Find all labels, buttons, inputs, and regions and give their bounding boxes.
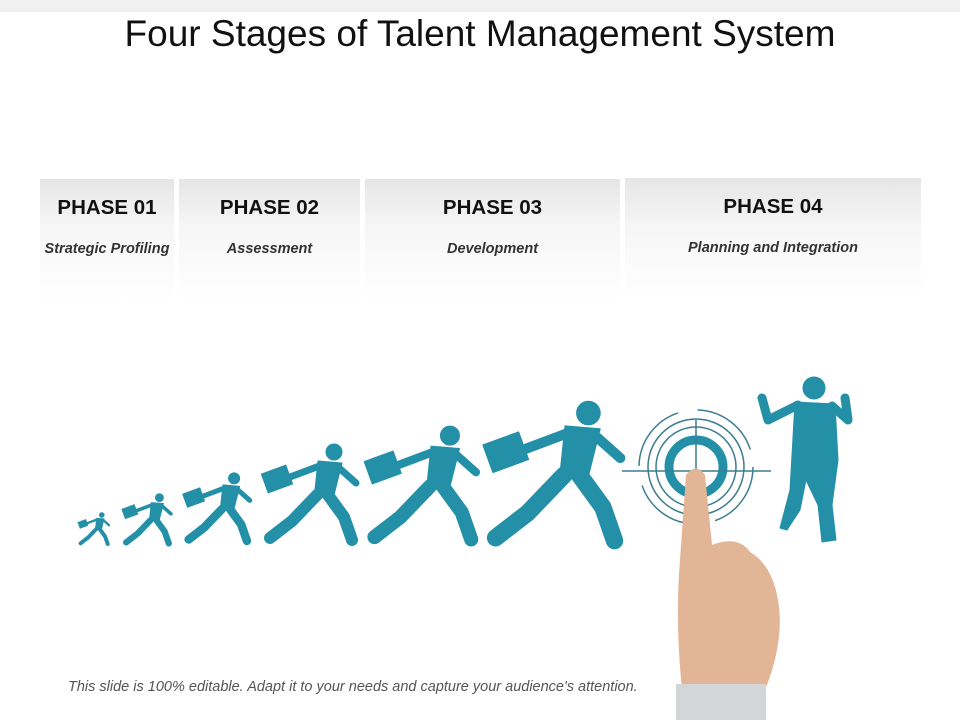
title: Four Stages of Talent Management System [125, 13, 835, 54]
panel: phase 04: PHASE 04 [723, 195, 823, 218]
panel: phase 01: Strategic Profiling [45, 241, 169, 257]
winner figure [762, 377, 848, 542]
runners [78, 401, 620, 544]
panel: phase 03 [365, 179, 620, 301]
hand [676, 468, 780, 720]
panel: phase 02: PHASE 02 [220, 196, 319, 219]
panel: phase 03: Development [447, 241, 538, 257]
panel: phase 02: Assessment [227, 241, 312, 257]
footer note: This slide is 100% editable. Adapt it to your needs and capture your audience's attention. [68, 679, 638, 695]
panel: phase 01 [40, 179, 174, 301]
panel: phase 03: PHASE 03 [443, 196, 542, 219]
panel: phase 04: Planning and Integration [688, 240, 858, 256]
panel: phase 01: PHASE 01 [57, 196, 157, 219]
panel: phase 04 [625, 178, 921, 300]
panel: phase 02 [179, 179, 360, 301]
target [622, 410, 771, 524]
